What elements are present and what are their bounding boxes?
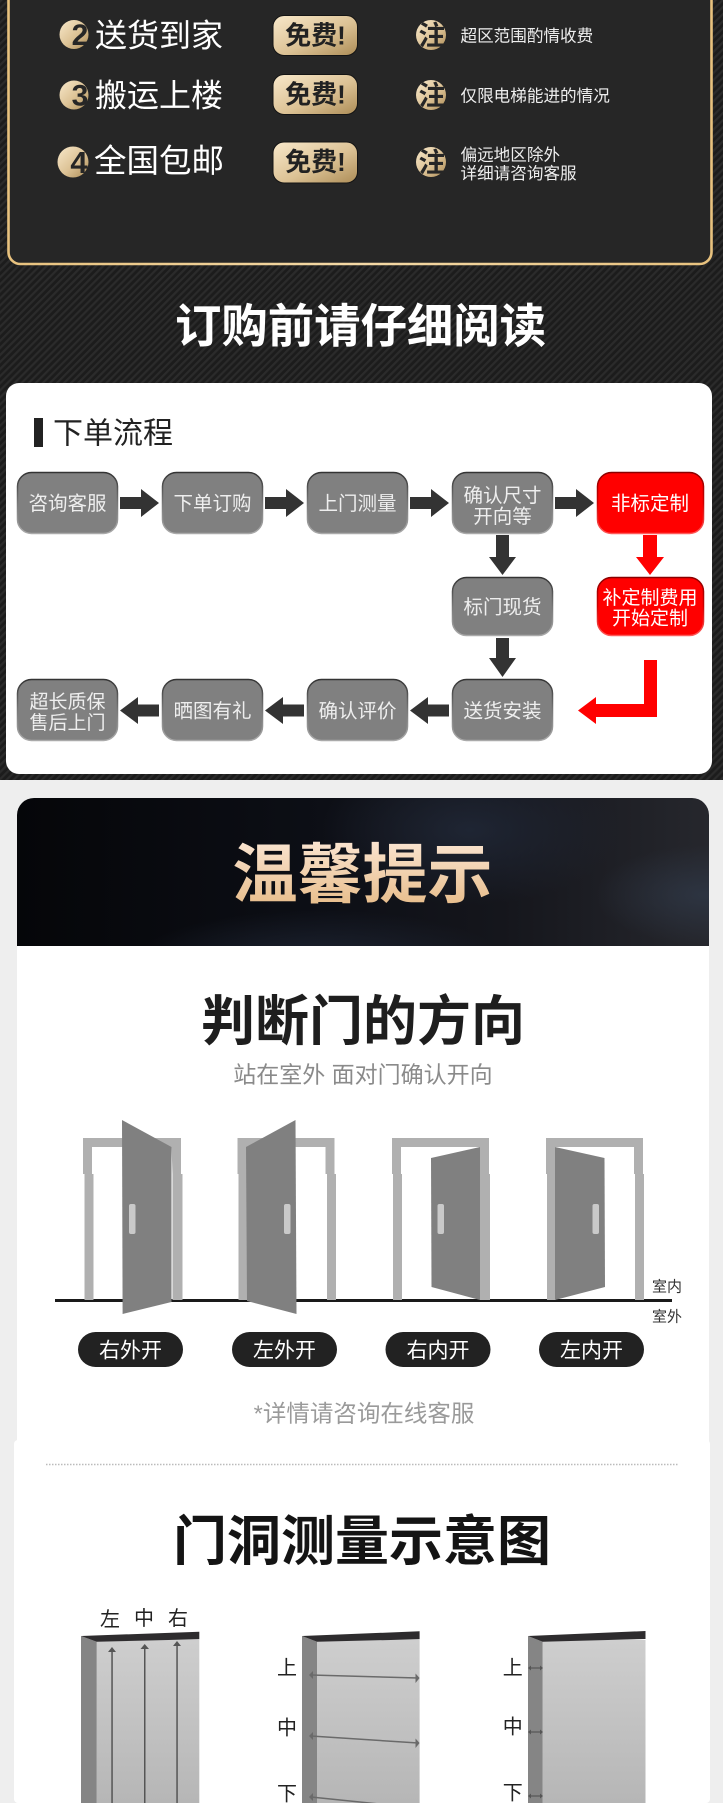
pill: left outward [232, 1332, 337, 1367]
free badge: 免费! [285, 80, 346, 110]
free badge: 免费! [285, 20, 346, 50]
flow step: order [162, 472, 262, 534]
flow step: order: 下单订购 [173, 493, 252, 515]
note text: 仅限电梯能进的情况 [460, 86, 610, 106]
arrow [120, 489, 159, 517]
flow step: review [308, 680, 408, 740]
arrow: red bent [578, 660, 657, 724]
panel: white card upper [17, 940, 709, 1445]
labels: left middle right [100, 1607, 188, 1631]
light page background [0, 780, 723, 1803]
icon: number 4: 4 [70, 145, 88, 180]
icon: note: 注 [418, 21, 446, 51]
icon: number 2 [60, 19, 88, 52]
pill: right inward: 右内开 [406, 1340, 470, 1362]
icon: note: 注 [418, 148, 446, 178]
flow step: photo gift: 晒图有礼 [173, 700, 252, 722]
service row: carrying upstairs [60, 74, 610, 114]
icon: number 3 [60, 80, 88, 112]
wall diagram: height [81, 1607, 199, 1803]
flow step: consult [18, 472, 118, 534]
flow step: warranty: 超长质保 [29, 691, 106, 713]
pill: right outward [78, 1332, 183, 1367]
arrows: vertical [108, 1641, 181, 1803]
icon: number 3: 3 [72, 80, 88, 112]
flow step: review: 确认评价 [318, 700, 397, 722]
flow step: photo gift [162, 680, 262, 740]
heading: read before ordering: 订购前请仔细阅读 [175, 300, 546, 352]
door diagram: right inward [392, 1138, 490, 1300]
labels: top middle bottom [503, 1656, 523, 1803]
pill: left outward: 左外开 [253, 1340, 316, 1362]
labels: top middle bottom: 上 [277, 1656, 297, 1680]
arrows: short horizontal [528, 1666, 543, 1798]
striped dark background [0, 0, 723, 780]
wall diagram: width [277, 1631, 420, 1803]
labels: top middle bottom: 中 [277, 1716, 297, 1740]
service row: nationwide shipping [58, 142, 577, 183]
door diagram: right outward [83, 1120, 182, 1314]
note text: 超区范围酌情收费 [460, 26, 593, 46]
flow step: non-standard [598, 472, 704, 534]
flow step: confirm: 确认尺寸 [463, 485, 542, 507]
note text [460, 146, 577, 183]
door diagram: left inward [546, 1138, 644, 1300]
label: outdoor: 室外 [652, 1308, 682, 1326]
title: door direction: 判断门的方向 [201, 992, 525, 1052]
panel: order process [6, 383, 712, 774]
note text: 详细请咨询客服 [460, 164, 577, 183]
free badge [273, 16, 358, 56]
arrow: red down [636, 535, 664, 575]
pill: left inward: 左内开 [560, 1340, 623, 1362]
flow step: stock door [452, 578, 552, 636]
flow step: warranty: 售后上门 [29, 712, 106, 734]
free badge [273, 74, 358, 114]
panel: white card lower [14, 1440, 710, 1803]
labels: left middle right: 左 [100, 1608, 120, 1631]
labels: left middle right: 中 [134, 1607, 154, 1630]
arrow [410, 489, 449, 517]
flow step: confirm: 开向等 [473, 506, 532, 528]
labels: top middle bottom [277, 1656, 297, 1803]
flow step: measure: 上门测量 [318, 493, 397, 515]
service name: 全国包邮 [94, 143, 224, 179]
free badge: 免费! [285, 147, 346, 177]
service name: 送货到家 [95, 18, 223, 54]
header band: warm tips [17, 798, 709, 946]
arrow: down [489, 638, 516, 677]
pill: left inward [539, 1332, 644, 1367]
door diagram: left outward [238, 1120, 336, 1314]
flow step: customization fee: 补定制费用 [602, 587, 698, 609]
arrow [555, 489, 594, 517]
flow step: non-standard: 非标定制 [611, 493, 689, 515]
arrow: down [489, 535, 516, 575]
flow step: confirm [452, 472, 552, 534]
header title: 温馨提示 [232, 838, 493, 911]
floor line [55, 1299, 672, 1302]
arrows: horizontal [309, 1671, 420, 1803]
flow step: consult: 咨询客服 [28, 493, 107, 515]
arrow [265, 489, 304, 517]
labels: top middle bottom: 中 [503, 1716, 523, 1738]
panel: free services [8, 0, 712, 264]
note text: 偏远地区除外 [460, 146, 560, 164]
free badge [273, 142, 358, 183]
subtitle: 站在室外 面对门确认开向 [233, 1062, 493, 1088]
flow step: delivery install [452, 680, 552, 740]
label: indoor: 室内 [652, 1278, 682, 1296]
flow step: stock door: 标门现货 [463, 596, 542, 618]
icon: number 4 [58, 145, 88, 180]
icon: number 2: 2 [72, 19, 88, 52]
footnote: *详情请咨询在线客服 [254, 1400, 474, 1426]
section heading: 下单流程 [53, 418, 173, 450]
icon: note: 注 [418, 81, 446, 111]
flow step: customization fee: 开始定制 [612, 608, 688, 630]
flow step: delivery install: 送货安装 [463, 700, 542, 722]
flow step: measure [308, 472, 408, 534]
arrow: left [410, 697, 449, 724]
pill: right outward: 右外开 [99, 1340, 162, 1362]
pill: right inward [386, 1332, 490, 1367]
service name: 搬运上楼 [95, 78, 223, 114]
labels: top middle bottom: 上 [503, 1656, 523, 1680]
service row: delivery [60, 16, 593, 56]
arrow: left [120, 697, 159, 724]
flow step: warranty [18, 680, 118, 740]
wall diagram: thickness [503, 1631, 646, 1803]
arrow: left [265, 697, 304, 724]
title: opening measurement: 门洞测量示意图 [173, 1512, 551, 1572]
flow step: customization fee [598, 578, 704, 636]
labels: left middle right: 右 [168, 1607, 188, 1630]
